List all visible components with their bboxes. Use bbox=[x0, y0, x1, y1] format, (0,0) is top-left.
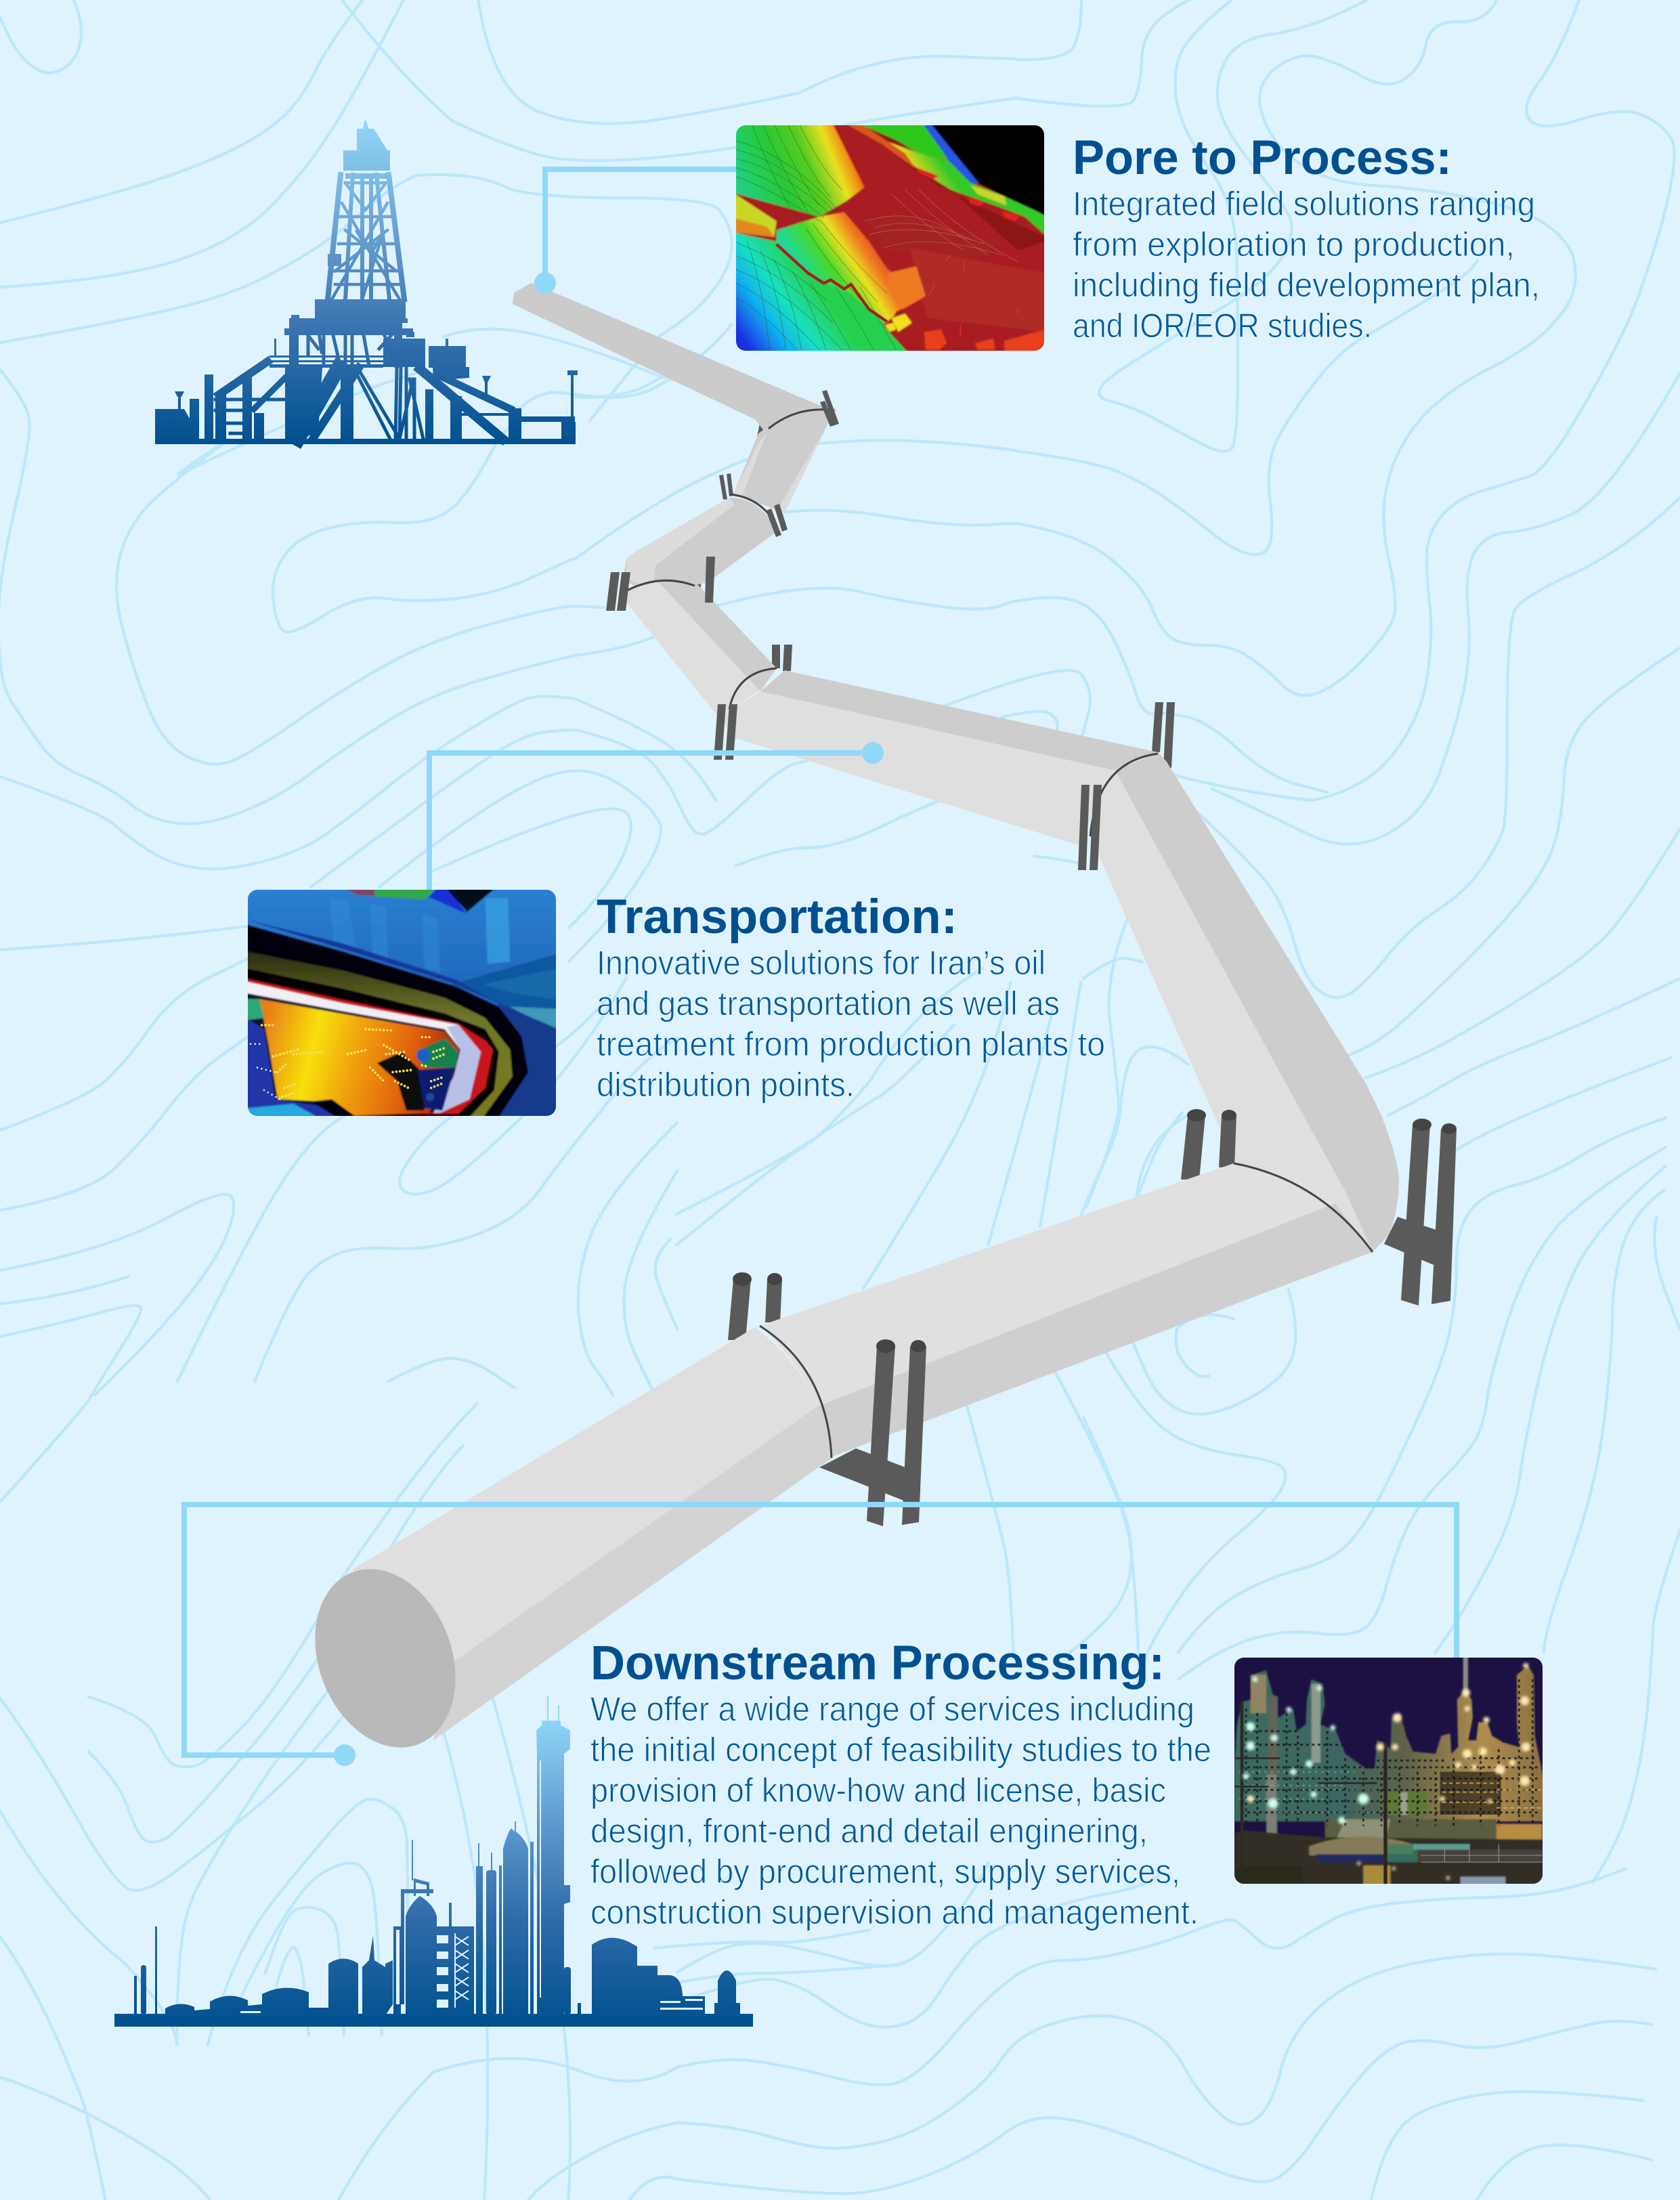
heading: transportation: Transportation: bbox=[597, 890, 957, 944]
body text: downstream processing: construction supervision and management. bbox=[590, 1893, 1199, 1931]
body text: downstream processing: the initial concept of feasibility studies to the bbox=[590, 1731, 1211, 1769]
pipe end cap bbox=[290, 1549, 480, 1768]
pipe segment: upper run bbox=[515, 285, 834, 433]
pipe segment: end run lower side bbox=[433, 1406, 832, 1740]
body text: transportation: Innovative solutions for Iran’s oil bbox=[597, 944, 1046, 982]
supports behind pipeline bbox=[693, 410, 1438, 1501]
body text: pore to process: from exploration to production, bbox=[1073, 225, 1515, 263]
heading: downstream processing: Downstream Processing: bbox=[590, 1637, 1165, 1690]
heading: pore to process: Pore to Process: bbox=[1073, 131, 1452, 185]
body text: downstream processing: design, front-end and detail enginering, bbox=[590, 1812, 1148, 1850]
body text: pore to process: and IOR/EOR studies. bbox=[1073, 307, 1372, 345]
marker dot: pore to process bbox=[534, 272, 556, 294]
body text: downstream processing: followed by procurement, supply services, bbox=[590, 1853, 1180, 1891]
oil rig lattice struts bbox=[215, 175, 511, 439]
body text: downstream processing bbox=[590, 1690, 1211, 1931]
pipe segment: seventh run lower side bbox=[817, 1203, 1373, 1457]
body text: transportation bbox=[597, 944, 1105, 1104]
body text: downstream processing: We offer a wide range of services including bbox=[590, 1690, 1194, 1728]
weld seams bbox=[621, 410, 1373, 1458]
refinery silhouette bbox=[114, 1696, 753, 2027]
heading and text: downstream processing bbox=[590, 1637, 1211, 1931]
pipe segment: fourth run light side bbox=[621, 580, 777, 718]
pipeline bbox=[290, 285, 1399, 1768]
connector: transportation bbox=[429, 753, 873, 890]
body text: transportation: and gas transportation as well as bbox=[597, 985, 1060, 1022]
refinery cut-outs bbox=[240, 1761, 703, 2013]
pipe segment: sixth run dark side bbox=[1115, 752, 1399, 1252]
supports in front of pipeline bbox=[606, 390, 1457, 1526]
body text: downstream processing: provision of know-how and license, basic bbox=[590, 1771, 1166, 1809]
photo: pipeline flow model bbox=[246, 887, 559, 1117]
pipe segment: fourth run dark side bbox=[658, 579, 777, 691]
connector: downstream processing bbox=[184, 1505, 1457, 1755]
marker dot: transportation bbox=[862, 742, 884, 764]
pipe segment: third bend bbox=[623, 498, 777, 596]
pipe segment: fifth run dark side bbox=[760, 670, 1158, 771]
pipe highlight: second bend bbox=[733, 414, 833, 513]
body text: transportation: distribution points. bbox=[597, 1066, 855, 1104]
pipe segment: sixth run light side bbox=[1090, 754, 1373, 1252]
body text: transportation: treatment from production plants to bbox=[597, 1025, 1105, 1063]
pipe highlight: third bend bbox=[626, 498, 735, 589]
pipe segment: second bend bbox=[733, 410, 834, 513]
body text: pore to process: including field development plan, bbox=[1073, 266, 1540, 304]
heading and text: transportation bbox=[597, 890, 1105, 1104]
oil rig silhouette bbox=[155, 121, 578, 444]
pipe segment: end run upper side bbox=[352, 1327, 817, 1663]
marker dot: downstream processing bbox=[334, 1744, 356, 1766]
pipe segment: fifth run light side bbox=[719, 691, 1115, 845]
body text: pore to process: Integrated field solutions ranging bbox=[1073, 185, 1535, 223]
supports between pipe runs bbox=[1181, 1109, 1236, 1180]
connector: pore to process bbox=[542, 167, 739, 283]
photo: reservoir model bbox=[733, 124, 1048, 352]
heading and text: pore to process bbox=[1073, 131, 1540, 345]
photo: refinery at night bbox=[1232, 1656, 1546, 1886]
body text: pore to process bbox=[1073, 185, 1540, 345]
pipe segment: seventh run upper side bbox=[760, 1163, 1335, 1406]
